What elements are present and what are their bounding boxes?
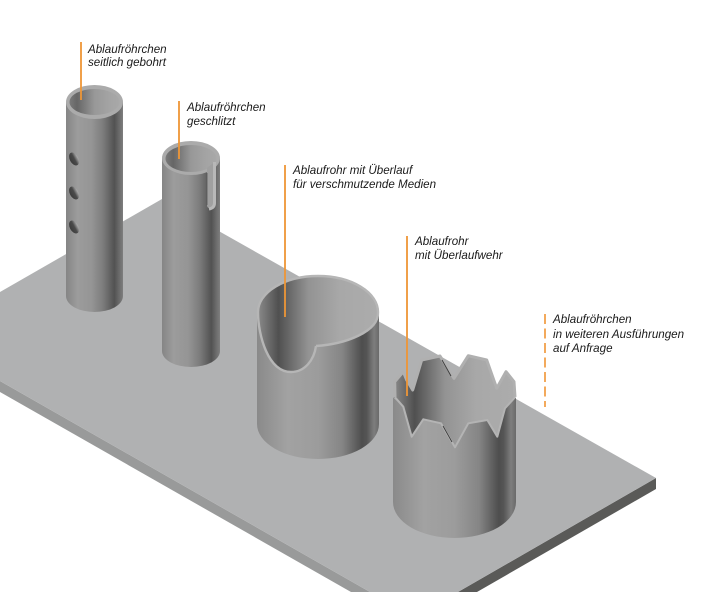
callout: slotted tube: geschlitzt: [187, 115, 236, 128]
callout: slotted tube: Ablaufröhrchen: [186, 101, 266, 114]
callout: further versions on request: auf Anfrage: [553, 342, 613, 355]
callout: weir tube: Ablaufrohr: [414, 235, 470, 248]
callout: slotted tube: [179, 101, 266, 159]
callout: weir tube: mit Überlaufwehr: [415, 249, 504, 262]
callout: overflow tube: [285, 164, 436, 317]
tube: with overflow weir: [393, 356, 516, 538]
side hole 2: [67, 185, 81, 201]
side hole 3: [67, 219, 81, 235]
callout: overflow tube: für verschmutzende Medien: [293, 178, 436, 191]
base plate: [0, 199, 656, 592]
tube: overflow for contaminated media: [257, 276, 379, 459]
tube: drilled at the side: [66, 85, 123, 312]
callout: further versions on request: [545, 313, 684, 407]
tube: slotted: [162, 141, 220, 367]
callout: weir tube: [407, 235, 504, 396]
side hole 1: [67, 151, 81, 167]
callout: further versions on request: Ablaufröhrchen: [552, 313, 632, 326]
callout: overflow tube: Ablaufrohr mit Überlauf: [292, 164, 414, 177]
callout: drilled tube: [81, 42, 167, 100]
slot: [207, 162, 214, 209]
callout: further versions on request: in weiteren Ausführungen: [553, 328, 684, 341]
callout: drilled tube: Ablaufröhrchen: [87, 43, 167, 56]
callout: drilled tube: seitlich gebohrt: [88, 56, 167, 69]
